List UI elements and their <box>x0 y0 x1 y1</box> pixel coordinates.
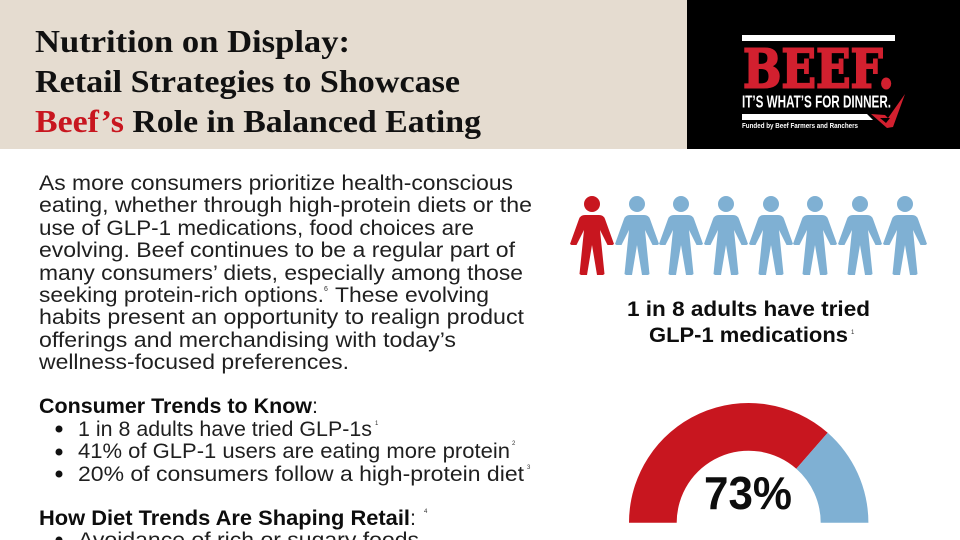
title: Nutrition on Display: <box>35 23 350 59</box>
section: consumer trends: 3 <box>527 465 531 471</box>
pictogram caption: 1 <box>851 330 855 336</box>
blue people <box>615 196 927 275</box>
section: consumer trends: 1 <box>375 421 379 427</box>
section: how diet trends are shaping retail: How Diet Trends Are Shaping Retail <box>39 506 410 530</box>
title: Retail Strategies to Showcase <box>35 63 460 99</box>
intro paragraph: evolving. Beef continues to be a regular part of <box>39 238 515 262</box>
title <box>35 23 481 139</box>
section: consumer trends: 1 in 8 adults have tried GLP-1s <box>78 417 372 441</box>
intro paragraph: These evolving <box>335 283 489 307</box>
pictogram caption: GLP-1 medications <box>649 323 848 347</box>
section: consumer trends: 20% of consumers follow a high-protein diet <box>78 462 524 486</box>
red person <box>570 196 614 275</box>
intro paragraph: 6 <box>324 286 328 293</box>
section: how diet trends are shaping retail: : <box>410 506 416 530</box>
section: consumer trends <box>39 394 531 486</box>
intro paragraph: use of GLP-1 medications, food choices are <box>39 216 474 240</box>
intro paragraph: habits present an opportunity to realign product <box>39 305 524 329</box>
section: how diet trends are shaping retail <box>39 506 428 540</box>
people pictogram: 1 in 8 <box>570 196 927 275</box>
intro paragraph: many consumers’ diets, especially among those <box>39 261 523 285</box>
logo: Beef It's What's For Dinner <box>687 0 960 149</box>
section: how diet trends are shaping retail: 4 <box>424 509 428 515</box>
section: consumer trends: 2 <box>512 441 516 447</box>
intro paragraph: wellness-focused preferences. <box>38 350 349 374</box>
pictogram caption: 1 in 8 adults have tried <box>627 297 870 321</box>
intro paragraph: seeking protein-rich options. <box>39 283 324 307</box>
section: consumer trends: Consumer Trends to Know <box>39 394 312 418</box>
intro paragraph: As more consumers prioritize health-conscious <box>39 171 513 195</box>
intro paragraph: eating, whether through high-protein diets or the <box>39 193 532 217</box>
intro paragraph <box>38 171 532 374</box>
header banner <box>0 0 687 149</box>
logo: Beef It's What's For Dinner: BEEF. <box>743 38 894 100</box>
logo: Beef It's What's For Dinner: IT’S WHAT’S FOR DINNER. <box>742 92 891 112</box>
pictogram caption <box>627 297 870 347</box>
title: Beef’s Role in Balanced Eating <box>35 103 481 139</box>
intro paragraph: offerings and merchandising with today’s <box>39 328 456 352</box>
gauge chart: 73% <box>629 403 868 523</box>
gauge chart: 73%: 73% <box>704 467 792 519</box>
logo: Beef It's What's For Dinner: Funded by Beef Farmers and Ranchers <box>742 123 858 130</box>
section: consumer trends: : <box>312 394 318 418</box>
section: consumer trends: 41% of GLP-1 users are eating more protein <box>78 439 510 463</box>
